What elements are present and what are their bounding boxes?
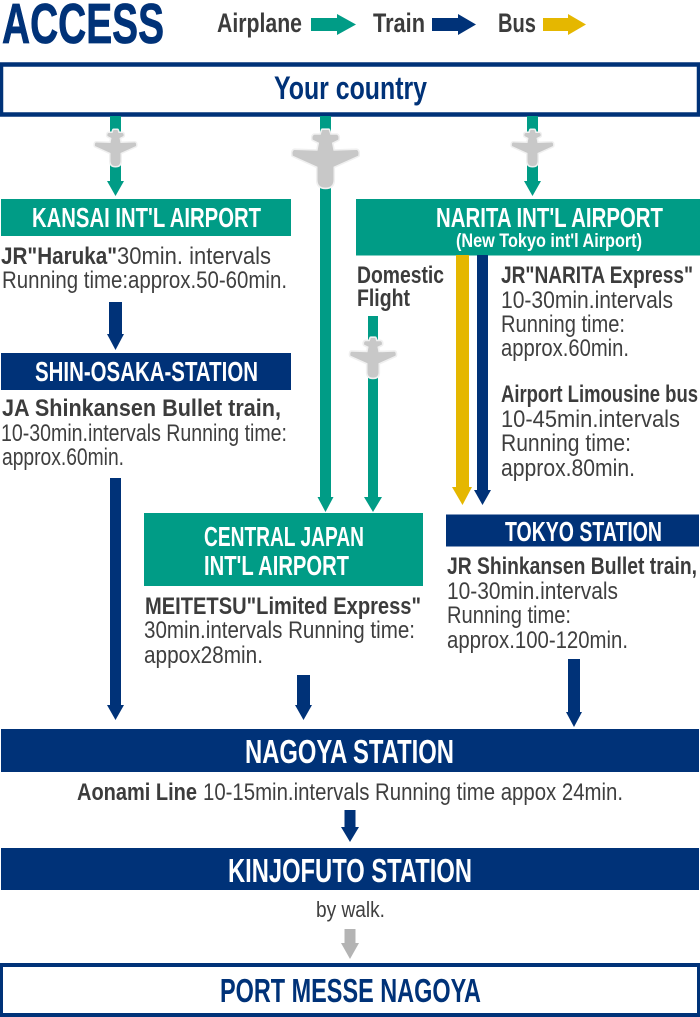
legend: bus label: Bus — [498, 8, 536, 38]
legend: airplane arrow — [311, 14, 356, 35]
panel: Central Japan airport header: INT'L AIRPORT — [204, 550, 349, 581]
arrow: Tokyo to Nagoya — [566, 659, 582, 727]
panel: Nagoya station header — [1, 729, 699, 772]
text: Shinkansen from Shin-Osaka details: JA Shinkansen Bullet train, — [2, 395, 281, 422]
text: Airport Limousine bus details: approx.80min. — [501, 455, 635, 482]
text: domestic flight — [357, 262, 444, 312]
legend: bus arrow — [543, 14, 586, 35]
text: Shinkansen from Tokyo details: Running time: — [447, 602, 571, 629]
icon: airplane Narita — [512, 130, 553, 166]
panel: Narita airport header: (New Tokyo int'l Airport) — [456, 231, 642, 252]
legend: train arrow — [432, 14, 476, 35]
panel: Kansai airport header: KANSAI INT'L AIRPORT — [32, 202, 261, 233]
text: by walk: by walk. — [316, 897, 385, 922]
panel: Narita airport header — [356, 199, 700, 256]
panel: Shin-Osaka station header — [1, 353, 291, 390]
legend: airplane label: Airplane — [217, 8, 302, 38]
text: Shinkansen from Shin-Osaka details: 10-30min.intervals Running time: — [1, 420, 287, 447]
text: Airport Limousine bus details: 10-45min.intervals — [501, 406, 680, 433]
icon: airplane Kansai — [95, 130, 136, 166]
text: Meitetsu details: appox28min. — [144, 642, 263, 669]
text: Shinkansen from Tokyo details — [447, 553, 697, 654]
text: Meitetsu details — [144, 593, 421, 669]
panel: Nagoya station header: NAGOYA STATION — [245, 733, 454, 770]
icon: airplane domestic — [350, 338, 396, 378]
text: Aonami Line details: 10-15min.intervals Running time appox 24min. — [203, 779, 623, 806]
arrow: Kansai to Shin-Osaka — [107, 302, 124, 350]
text: Haruka details: Running time:approx.50-60min. — [2, 267, 287, 294]
text: Narita Express details — [501, 262, 693, 362]
text: Meitetsu details: MEITETSU"Limited Express" — [145, 593, 421, 620]
arrow: Central Japan to Nagoya — [295, 675, 312, 720]
panel: Kinjofuto station header — [1, 848, 699, 890]
text: Meitetsu details: 30min.intervals Running time: — [144, 617, 415, 644]
text: Narita Express details: approx.60min. — [501, 335, 629, 362]
arrow: country to Central Japan — [318, 116, 334, 512]
panel: Central Japan airport header: CENTRAL JAPAN — [204, 521, 364, 552]
arrow: domestic flight to Central Japan — [364, 316, 382, 512]
text: Haruka details: JR"Haruka" — [1, 243, 117, 270]
text: Haruka details: 30min. intervals — [117, 243, 271, 270]
destination box: Port Messe Nagoya — [1, 965, 699, 1015]
text: Shinkansen from Shin-Osaka details: approx.60min. — [2, 444, 124, 471]
text: Narita Express details: Running time: — [501, 311, 625, 338]
text: Narita Express details: 10-30min.intervals — [501, 287, 673, 314]
arrow: country to Narita — [524, 116, 541, 196]
legend — [217, 8, 586, 38]
panel: Kinjofuto station header: KINJOFUTO STATION — [228, 852, 472, 889]
destination box: Port Messe Nagoya: PORT MESSE NAGOYA — [220, 972, 481, 1009]
arrow: Nagoya to Kinjofuto — [341, 810, 359, 842]
arrow: Shin-Osaka to Nagoya — [107, 478, 124, 720]
arrow: country to Kansai — [107, 116, 124, 196]
text: Aonami Line details: Aonami Line — [77, 779, 197, 806]
icon: airplane Central Japan — [292, 130, 358, 188]
arrow: Narita train to Tokyo — [474, 255, 491, 505]
text: Shinkansen from Tokyo details: approx.100-120min. — [447, 627, 628, 654]
text: Aonami Line details — [77, 779, 623, 806]
text: Shinkansen from Shin-Osaka details — [1, 395, 287, 471]
legend: train label: Train — [373, 8, 425, 38]
arrow: walk to Port Messe — [341, 929, 359, 959]
text: Shinkansen from Tokyo details: 10-30min.intervals — [447, 578, 618, 605]
panel: Central Japan airport header — [144, 513, 423, 586]
panel: Shin-Osaka station header: SHIN-OSAKA-STATION — [35, 356, 258, 387]
origin box: your country — [1, 64, 699, 114]
text: Airport Limousine bus details: Running time: — [501, 430, 631, 457]
arrow: Narita bus to Tokyo — [452, 255, 472, 505]
text: Airport Limousine bus details — [501, 381, 698, 482]
text: domestic flight: Flight — [357, 285, 410, 312]
text: domestic flight: Domestic — [357, 262, 444, 289]
text: Haruka details — [1, 243, 287, 294]
origin box: your country: Your country — [274, 70, 427, 106]
panel: Kansai airport header — [1, 199, 291, 236]
